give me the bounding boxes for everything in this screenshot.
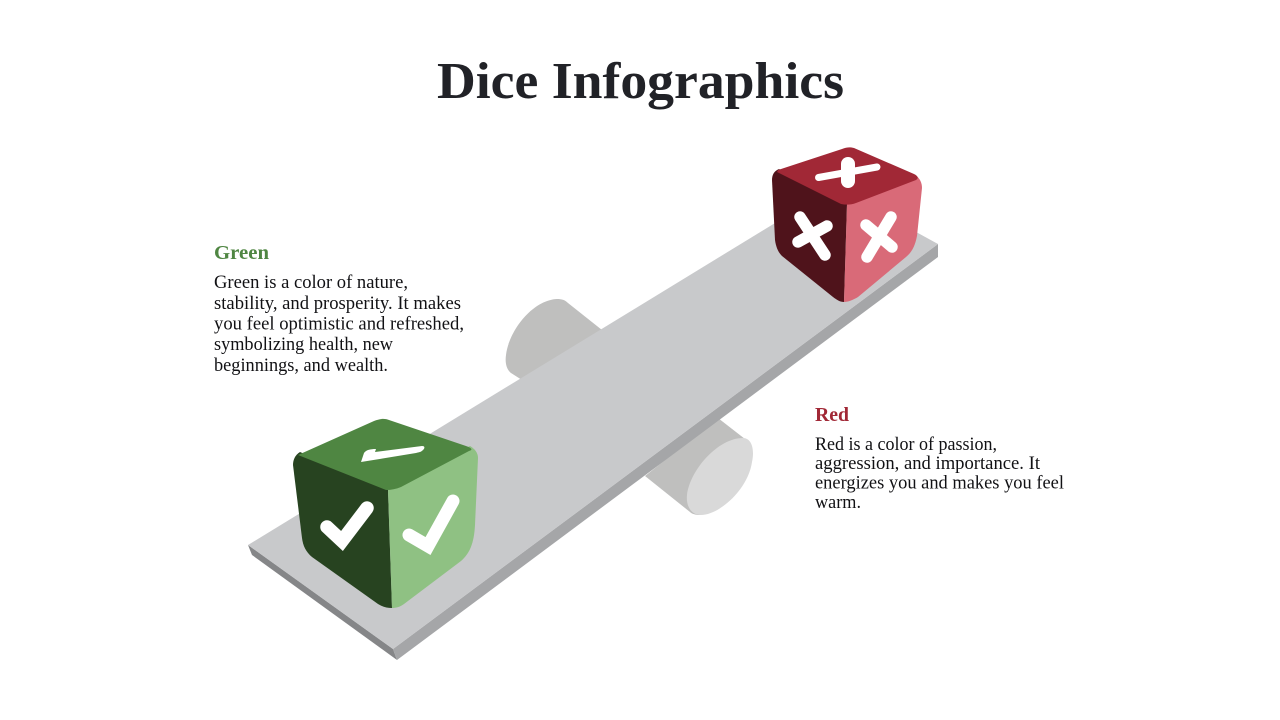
body: green: Green is a color of nature, [214,273,408,293]
body: red: warm. [815,493,861,513]
cylinder front part [645,418,752,515]
green die left face [293,452,392,608]
body: green: stability, and prosperity. It makes [214,294,461,314]
body: red [815,435,1064,513]
green die [293,419,478,608]
text block: green [214,242,464,376]
icon: x marks [798,164,892,257]
body: red: energizes you and makes you feel [815,474,1064,494]
body: green: beginnings, and wealth. [214,356,388,376]
red die right face [844,175,922,302]
heading: red: Red [815,404,850,426]
body: red: aggression, and importance. It [815,454,1041,474]
body: red: Red is a color of passion, [815,435,997,455]
plank left side [248,545,397,660]
green die right face [388,446,478,608]
body: green: you feel optimistic and refreshed, [214,314,464,334]
plank right side [393,244,938,660]
icon: check marks [327,501,453,546]
heading: green: Green [214,242,270,264]
seesaw: cylinder pivot and plank [248,187,938,660]
text block: red [815,404,1064,513]
red die left face [772,169,847,302]
icon: top check mark [361,446,424,462]
red die top face [777,147,918,205]
red die [772,147,922,302]
green die top face [298,419,471,490]
cylinder back part [506,299,602,380]
cylinder end cap [687,438,753,515]
plank top [248,187,938,649]
body: green: symbolizing health, new [214,335,394,355]
title: Dice Infographics [437,53,844,110]
body: green [214,273,464,376]
